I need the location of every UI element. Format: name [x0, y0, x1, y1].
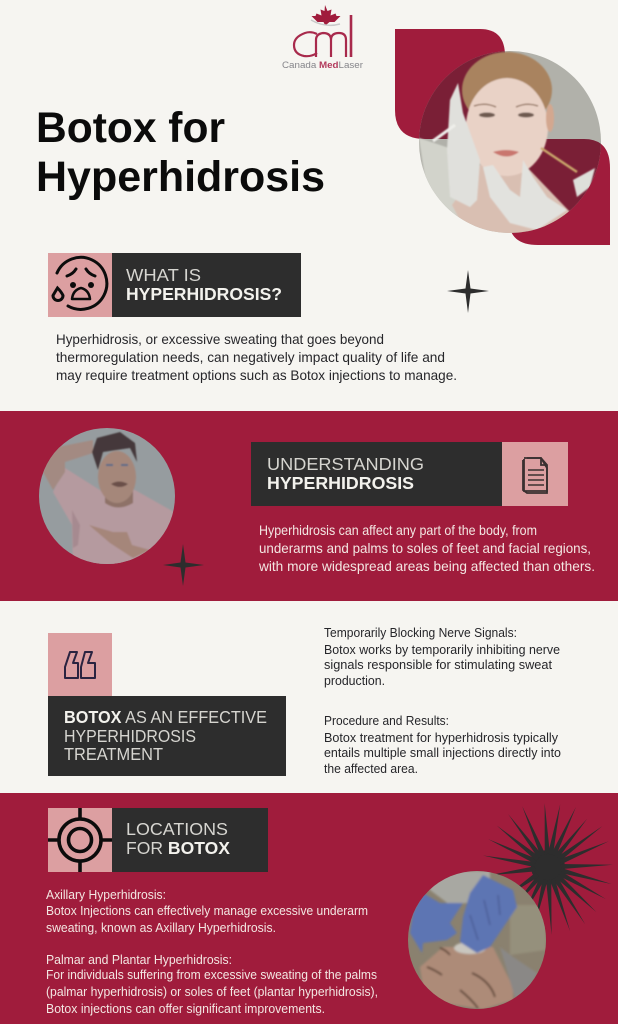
text block: temporarily blocking nerve signals: production. [324, 674, 385, 688]
text block: body areas: underarms and palms to soles of feet and facial regions, [259, 540, 591, 556]
decorative leaf top [395, 29, 505, 139]
hero: leaf shapes and woman photo [395, 29, 610, 245]
text block: body areas: Hyperhidrosis can affect any part of the body, from [259, 522, 537, 538]
text block: definition: may require treatment options such as Botox injections to manage. [56, 367, 457, 383]
text block: definition [56, 331, 457, 383]
heading bar [112, 808, 268, 872]
text block: palmar and plantar hyperhidrosis: Palmar and Plantar Hyperhidrosis: [46, 953, 232, 967]
text block: procedure and results: Procedure and Results: [324, 714, 449, 728]
text block: axillary hyperhidrosis: Axillary Hyperhidrosis: [46, 888, 166, 902]
icon: maple leaf [312, 5, 340, 25]
text block: temporarily blocking nerve signals: Botox works by temporarily inhibiting nerve [324, 643, 560, 657]
text block: palmar and plantar hyperhidrosis [46, 953, 378, 1016]
text block: procedure and results [324, 714, 561, 776]
heading bar [251, 442, 502, 506]
title [36, 104, 325, 201]
heading bar: HYPERHIDROSIS [267, 473, 414, 493]
text block: temporarily blocking nerve signals: Temporarily Blocking Nerve Signals: [324, 626, 517, 640]
heading bar: FOR BOTOX [126, 838, 230, 858]
section header: What is Hyperhidrosis [48, 253, 301, 317]
heading bar: UNDERSTANDING [267, 454, 424, 474]
heading bar: HYPERHIDROSIS [64, 726, 196, 746]
icon tile: document [502, 442, 568, 506]
icon: four-point star [163, 544, 204, 586]
heading bar: HYPERHIDROSIS? [126, 284, 282, 304]
text block: procedure and results: the affected area. [324, 762, 418, 776]
text block: procedure and results: Botox treatment for hyperhidrosis typically [324, 731, 559, 745]
logo letters cml [294, 15, 351, 57]
photo: woman receiving injection [419, 51, 601, 233]
title: Hyperhidrosis [36, 153, 325, 201]
text block: body areas: with more widespread areas being affected than others. [258, 558, 595, 574]
panel: understanding hyperhidrosis [0, 411, 618, 601]
text block: palmar and plantar hyperhidrosis: (palmar hyperhidrosis) or soles of feet (plantar hyperhidrosis), [46, 985, 378, 999]
text block: axillary hyperhidrosis: Botox Injections can effectively manage excessive underarm [46, 904, 368, 918]
text block: definition: Hyperhidrosis, or excessive sweating that goes beyond [56, 331, 384, 347]
icon tile: quotation mark [48, 633, 112, 696]
title: Botox for [36, 104, 225, 152]
heading bar [112, 253, 301, 317]
text block: palmar and plantar hyperhidrosis: Botox injections can offer significant improvements. [46, 1002, 325, 1016]
heading bar: TREATMENT [64, 744, 163, 764]
photo: man with underarm sweat [39, 428, 175, 570]
heading bar: WHAT IS [126, 265, 201, 285]
text block: temporarily blocking nerve signals: signals responsible for stimulating sweat [324, 658, 553, 672]
heading bar: BOTOX AS AN EFFECTIVE [64, 707, 267, 727]
text block: procedure and results: entails multiple small injections directly into [324, 746, 561, 760]
text block: body areas [258, 522, 595, 574]
section header: Botox as an effective treatment [48, 633, 286, 776]
icon: starburst [483, 803, 613, 935]
text block: definition: thermoregulation needs, can negatively impact quality of life and [56, 349, 445, 365]
text block: axillary hyperhidrosis [46, 888, 368, 935]
icon: four-point star [447, 270, 489, 313]
heading bar: LOCATIONS [126, 819, 228, 839]
heading bar [48, 696, 286, 776]
logo: Canada MedLaser [282, 5, 363, 70]
photo: botox injection on forehead [408, 871, 546, 1009]
text block: temporarily blocking nerve signals [324, 626, 560, 688]
text block: palmar and plantar hyperhidrosis: For individuals suffering from excessive sweating of the palms [46, 968, 377, 982]
decorative leaf bottom [500, 139, 610, 245]
icon tile: sweating face [48, 253, 112, 317]
logo wordmark: Canada MedLaser [282, 60, 363, 70]
icon tile: target [48, 808, 112, 872]
text block: axillary hyperhidrosis: sweating, known as Axillary Hyperhidrosis. [46, 921, 276, 935]
panel: locations for botox [0, 793, 618, 1024]
